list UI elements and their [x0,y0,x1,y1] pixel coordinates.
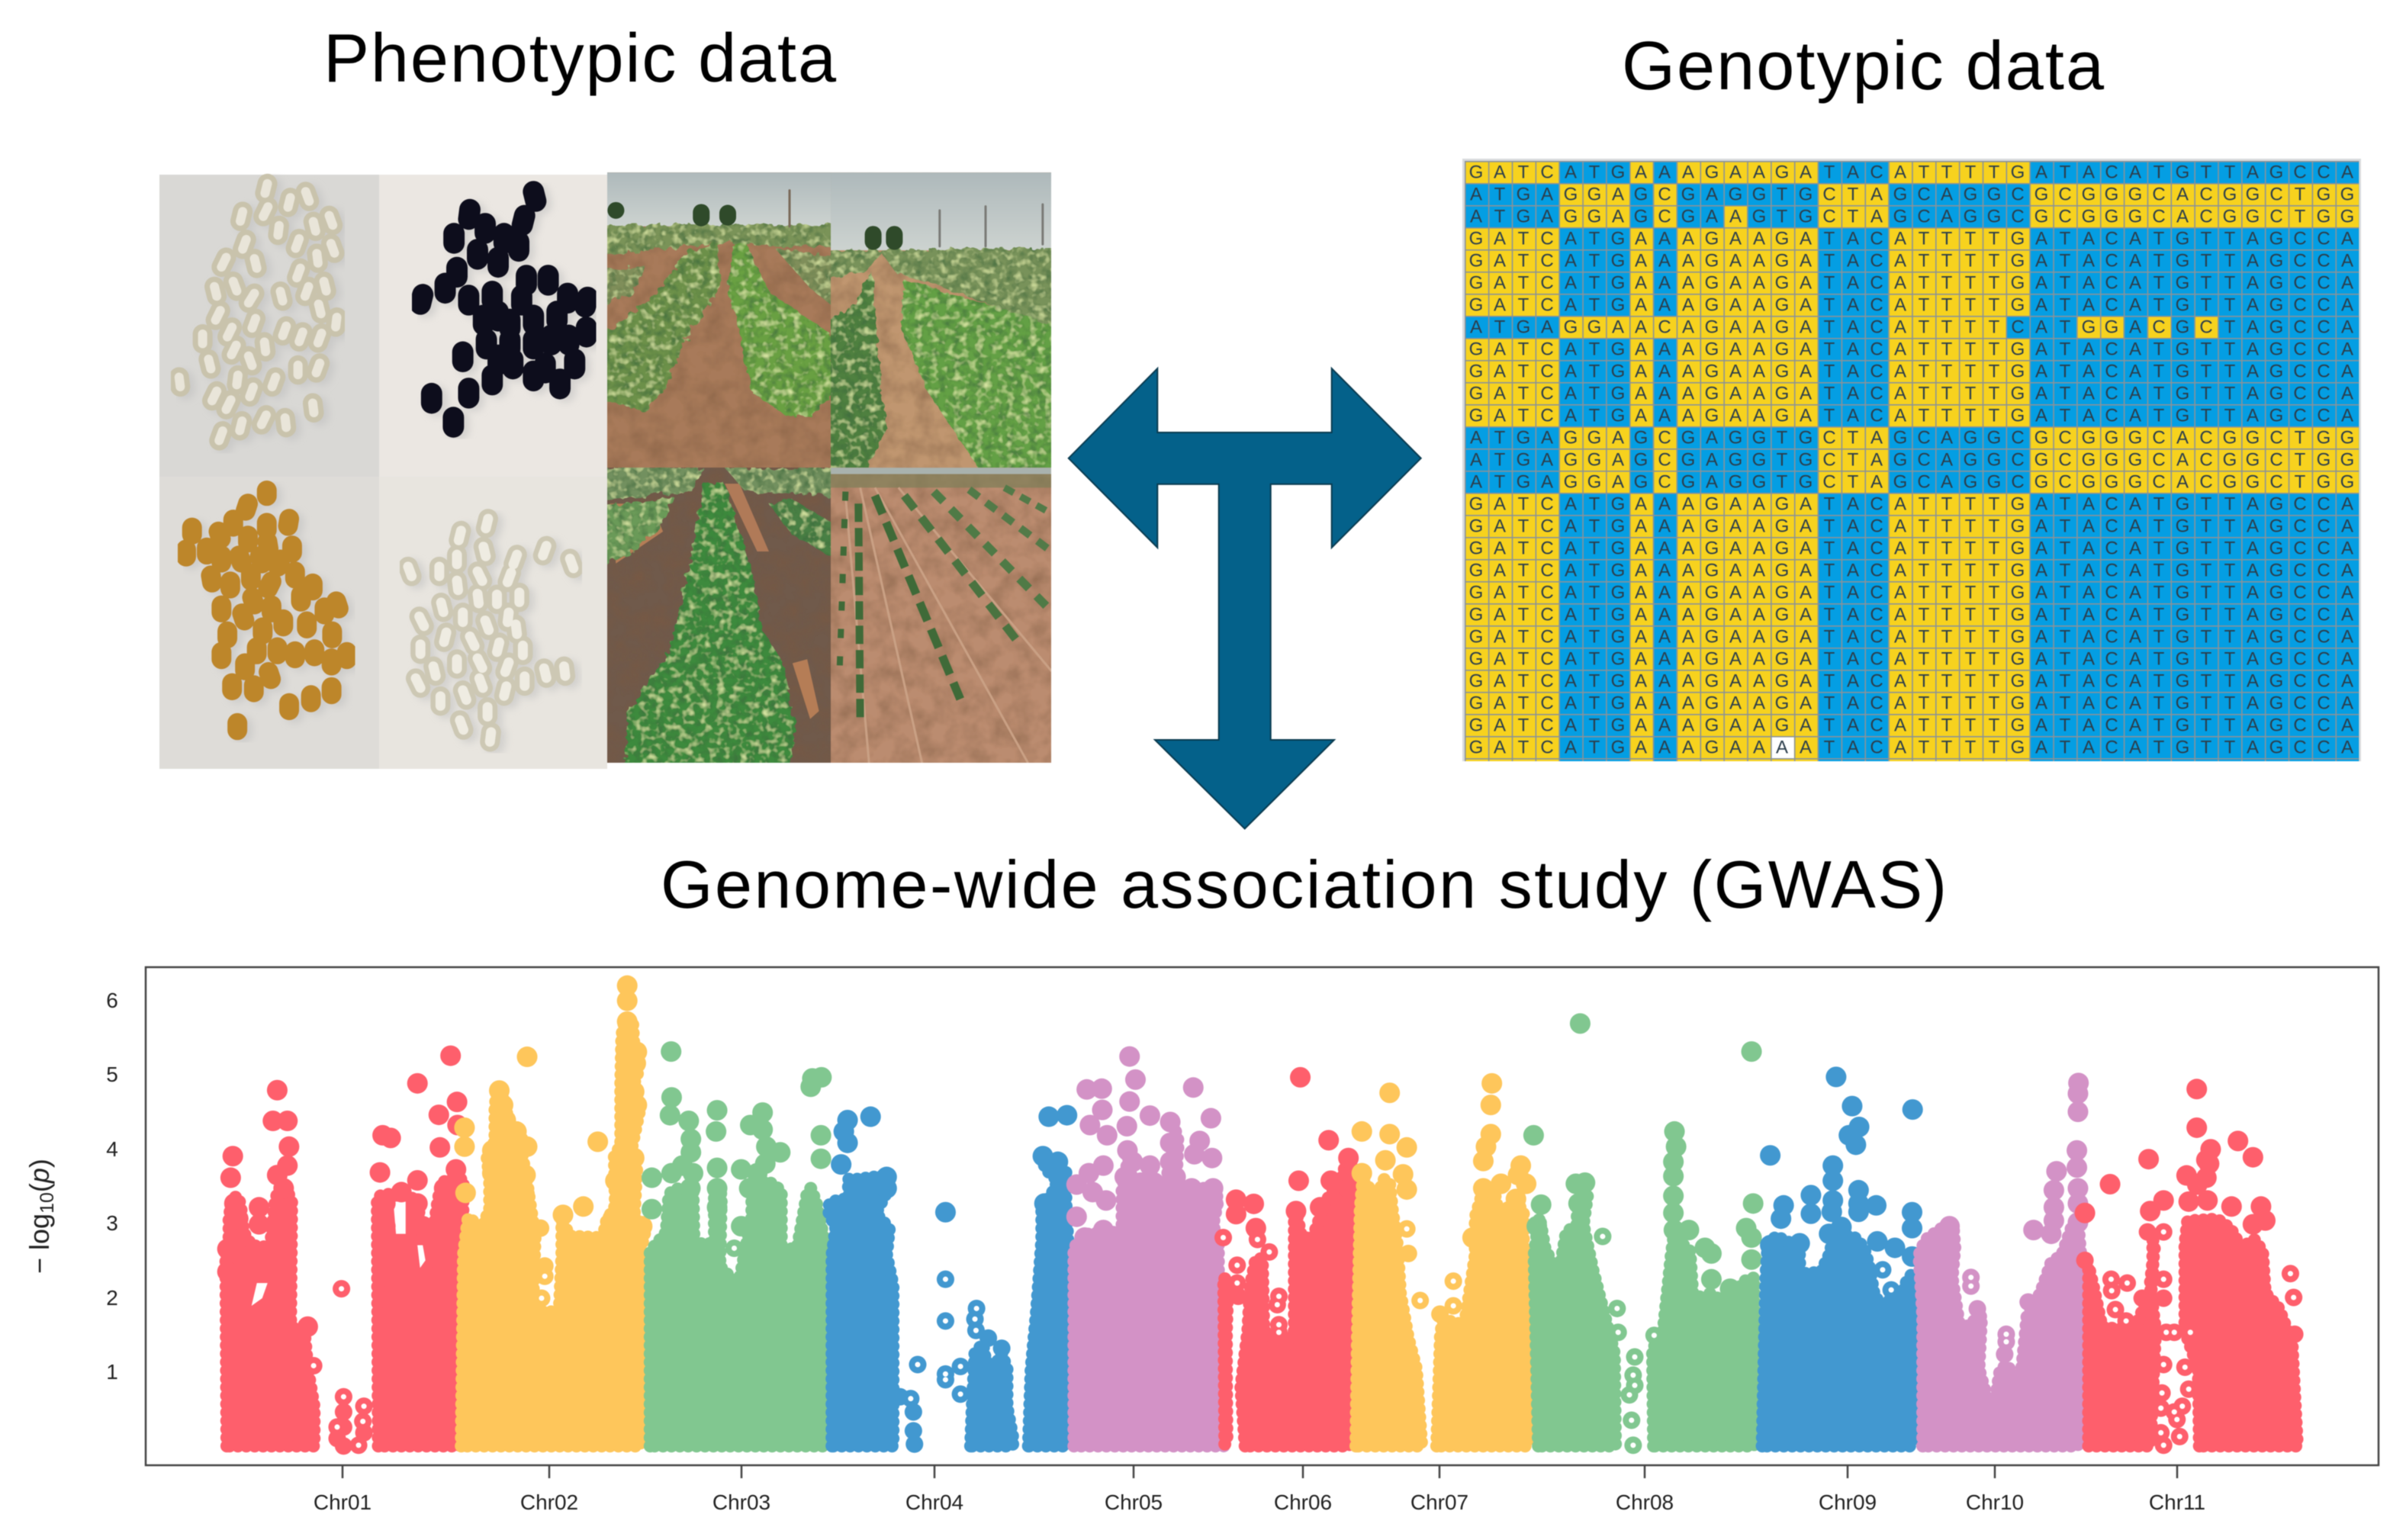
Chr05 points [1074,1056,1224,1446]
genotype letters: GATCATGAAAGAAGATACATTTTGATACATGTTAGCCA [1469,583,2353,603]
y axis label: ( [24,1183,55,1192]
x axis chromosome labels: Chr11 [2149,1490,2205,1514]
genotype letters: GATCATGAAAGAAGATACATTTTGATACATGTTAGCCA [1469,715,2353,735]
genotype letters: GATCATGAAAGAAGATACATTTTGATACATGTTAGCCA [1469,494,2353,514]
genotype letters: GATCATGAAAGAAGATACATTTTGATACATGTTAGCCA [1469,339,2353,360]
Chr08 second arm [1652,1052,1755,1446]
chromosomes 1 to 3 [226,985,824,1446]
genotype letters: GATCATGAAAGAAGATACATTTTGATACATGTTAGCCA [1469,294,2353,316]
Chr11 points [2085,1089,2298,1446]
photo: field rows, view C [601,468,834,767]
Chr02 points [462,985,645,1446]
genotype letters: GATCATGAAAGAAAATACATTTTGATACATGTTAGCCA [1469,737,2353,758]
genotype letters: ATGAGGAGCGAGGTGCTAGCAGGCGCGGGCACGGCTGG [1470,450,2354,470]
genotype letters: GATCATGAAAGAAGATACATTTTGATACATGTTAGCCA [1469,604,2353,625]
genotype letters: GATCATGAAAGAAGATACATTTTGATACATGTTAGCCA [1469,560,2353,581]
heading: Genome-wide association study (GWAS): Genome-wide association study (GWAS) [661,847,1947,922]
y axis ticks: 2 [106,1286,118,1310]
x axis chromosome labels: Chr02 [520,1490,578,1514]
photo: field rows, view B [828,172,1063,471]
Chr01 points [226,1056,463,1446]
title: Genotypic data: Genotypic data [1622,28,2105,104]
genotype letters: GATCATGAAAGAAGATACATTTTGATACATGTTAGCCA [1469,362,2353,381]
y axis ticks: 4 [106,1137,118,1161]
photo: black seeds [379,175,607,477]
photo: brown seeds [159,477,379,769]
panel: phenotypic photo collage [159,172,1063,769]
white missing-call cell [1771,736,1794,758]
genotype letters: GATCATGAAAGAAGATACATTTTGATACATGTTAGCCA [1469,229,2353,249]
genotype letters: GATCATGAAAGAAGATACATTTTGATACATGTTAGCCA [1469,693,2353,714]
alternate haplotype rows [1465,183,2359,493]
x axis chromosome labels: Chr01 [314,1490,372,1514]
genotype letters: GATCATGAAAGAAGATACATTTTGATACATGTTAGCCA [1469,648,2353,670]
genotype letters: ATGAGGAACAGAAGATACATTTTCATGGACGCTAGCCA [1470,317,2353,337]
genotype letters: ATGAGGAGCGAGGTGCTAGCAGGCGCGGGCACGGCTGG [1470,185,2354,204]
photo: cream seeds [379,477,607,769]
x axis chromosome labels: Chr08 [1616,1490,1674,1514]
x axis chromosome labels [314,1490,2205,1514]
x axis chromosome labels: Chr07 [1410,1490,1468,1514]
genotype letters: GATCATGAAAGAAGATACATTTTGATACATGTTAGCCA [1469,671,2353,691]
panel: genotype matrix [1462,159,2361,761]
genotype letters: GATCATGAAAGAAGATACATTTTGATACATGTTAGCCA [1469,627,2353,647]
photo: white seeds [159,175,379,477]
y axis ticks: 1 [106,1360,118,1384]
x axis chromosome labels: Chr03 [712,1490,770,1514]
plot frame [146,967,2379,1465]
x axis chromosome labels: Chr10 [1966,1490,2024,1514]
genotype letters: GATCATGAAAGAAGATACATTTTGATACATGTTAGCCA [1469,162,2353,183]
arrow: three-way double-headed T arrow [1069,368,1421,828]
x axis chromosome labels: Chr05 [1105,1490,1163,1514]
y axis ticks: 5 [106,1063,118,1086]
genotype letters: ATGAGGAGCGAGGTGCTAGCAGGCGCGGGCACGGCTGG [1470,427,2354,448]
photo: field rows, view A [598,172,840,468]
photo: field rows, view D [831,468,1051,763]
yellow columns of the majority haplotype [1465,161,2029,761]
Chr04 points [828,1115,1069,1446]
x axis chromosome labels: Chr09 [1819,1490,1877,1514]
genotype letters: GATCATGAAAGAAGATACATTTTGATACATGTTAGCCA [1469,516,2353,537]
Chr03 points [650,1052,824,1446]
Chr10 points [1919,1083,2083,1446]
y axis ticks [106,989,118,1384]
recombinant row 8 [1465,316,2359,338]
genotype letters: GATCATGAAAGAAGATACATTTTGATACATGTTAGCCA [1469,383,2353,404]
Chr08 first arm [1533,1024,1635,1446]
y axis ticks: 6 [106,989,118,1012]
y axis label: p) [24,1159,55,1183]
genotype letters: GATCATGAAAGAAGATACATTTTGATACATGTTAGCCA [1469,273,2353,293]
chromosomes 8 (second arm) to 11 [1652,1052,2298,1446]
title: Phenotypic data: Phenotypic data [323,21,837,97]
genotype letters: GATCATGAAAGAAGATACATTTTGATACATGTTAGCCA [1469,250,2353,272]
genotype letters: ATGAGGAGCGAGGTGCTAGCAGGCGCGGGCACGGCTGG [1470,471,2354,493]
x axis ticks [343,1465,2177,1478]
Chr09 points [1762,1077,1912,1446]
Chr06 points [1223,1077,1353,1446]
y axis label: 10 [37,1192,58,1214]
y axis ticks: 3 [106,1211,118,1235]
x axis chromosome labels: Chr06 [1274,1490,1332,1514]
genotype letters [1469,162,2354,758]
chart: Manhattan plot [24,967,2379,1514]
x axis chromosome labels: Chr04 [905,1490,963,1514]
genotype letters: ATGAGGAGCGAAGTGCTAGCAGGCGCGGGCACGGCTGG [1470,206,2354,227]
genotype letters: GATCATGAAAGAAGATACATTTTGATACATGTTAGCCA [1469,406,2353,426]
Chr07 points [1356,1083,1528,1446]
y axis label: − log [24,1214,55,1274]
chromosomes 4 to 8 (first arm) [828,1024,1635,1446]
genotype letters: GATCATGAAAGAAGATACATTTTGATACATGTTAGCCA [1469,539,2353,558]
